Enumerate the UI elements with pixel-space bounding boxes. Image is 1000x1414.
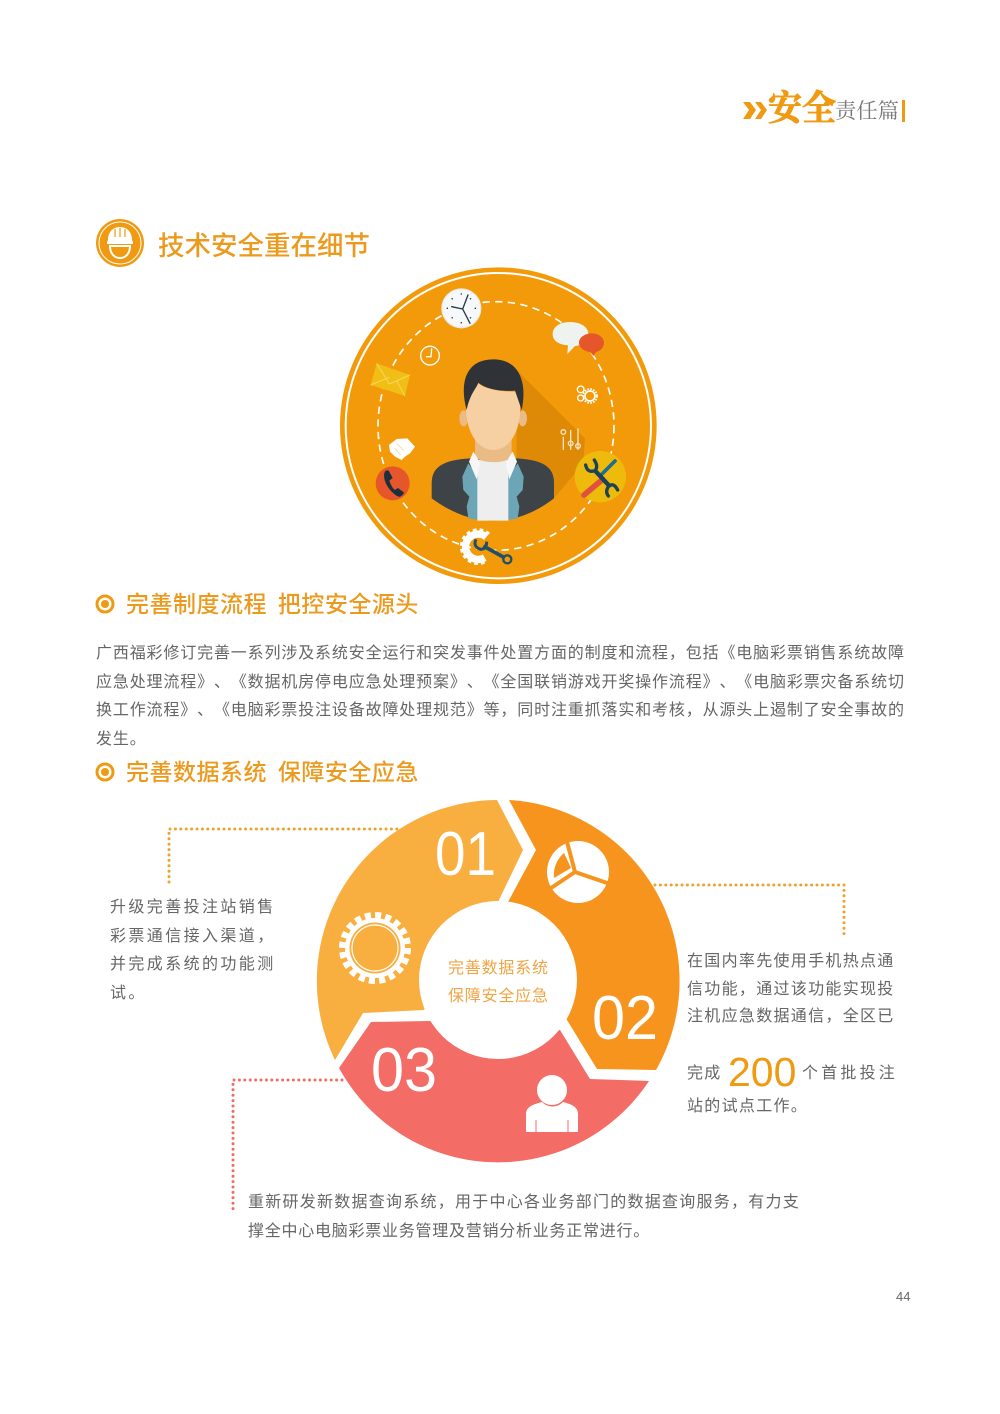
center label: 保障安全应急 [448, 988, 549, 1005]
center label: 完善数据系统 [448, 960, 549, 977]
sliders icon [561, 428, 580, 450]
line 1: 广西福彩修订完善一系列涉及系统安全运行和突发事件处置方面的制度和流程，包括《电脑彩票销售系统故障 [96, 645, 905, 662]
line 3: 换工作流程》、《电脑彩票投注设备故障处理规范》等，同时注重抓落实和考核，从源头上遏制了安全事故的 [96, 702, 905, 719]
item 02 lead in: 完成 [687, 1065, 722, 1082]
text block: item 01: 试。 [110, 985, 147, 1002]
center disc [419, 901, 577, 1059]
item 02 first lines: 注机应急数据通信，全区已 [687, 1008, 895, 1025]
cycle diagram [317, 800, 680, 1162]
number 01: 01 [435, 820, 496, 889]
icon: person [526, 1075, 578, 1132]
body paragraph [96, 644, 905, 748]
handshake icon [389, 438, 415, 460]
item 02 first lines [687, 952, 895, 1025]
timer icon [421, 346, 439, 365]
section heading two: 完善数据系统 保障安全应急 [126, 759, 419, 785]
text block: item 01: 并完成系统的功能测 [110, 956, 276, 973]
icon: safety helmet badge [96, 219, 144, 267]
header bar [902, 100, 905, 122]
gear and wrench icon [461, 530, 511, 563]
chat bubbles icon [553, 322, 604, 356]
connector: item 01 dotted line [169, 829, 397, 882]
item 02 line four: 个首批投注 [802, 1065, 898, 1082]
icon: pie chart [547, 838, 610, 903]
segment 03 [339, 1021, 649, 1162]
item 02 first lines: 信功能，通过该功能实现投 [687, 980, 895, 998]
text block: item 02 [687, 952, 898, 1115]
line 4: 发生。 [96, 731, 147, 748]
main heading: 技术安全重在细节 [158, 231, 370, 261]
item 03 line two: 撑全中心电脑彩票业务管理及营销分析业务正常进行。 [248, 1223, 650, 1240]
key number 200: 200 [728, 1049, 796, 1095]
clock icon [441, 288, 481, 328]
phone icon [376, 466, 410, 500]
number 03: 03 [371, 1036, 437, 1105]
item 02 first lines: 在国内率先使用手机热点通 [687, 953, 895, 970]
text block: item 03 [248, 1193, 800, 1240]
segment 01 [317, 800, 523, 1060]
item 03 line one: 重新研发新数据查询系统，用于中心各业务部门的数据查询服务，有力支 [248, 1194, 800, 1211]
header chapter mark [743, 81, 905, 131]
text block: item 01: 升级完善投注站销售 [110, 899, 276, 916]
person [432, 359, 554, 521]
bullet: section two [97, 764, 113, 780]
illustration: technician in orange circle [340, 267, 657, 584]
center label [448, 959, 549, 1005]
line 2: 应急处理流程》、《数据机房停电应急处理预案》、《全国联销游戏开奖操作流程》、《电脑彩票灾备系统切 [96, 674, 905, 691]
chapter word: responsibility: 责任篇 [835, 95, 899, 125]
connector: item 03 dotted line [233, 1080, 342, 1210]
envelope icon [371, 363, 410, 396]
number 02: 02 [592, 984, 658, 1053]
chapter word: safety: 安全 [768, 81, 836, 131]
text block: item 01: 彩票通信接入渠道， [110, 928, 276, 945]
icon: gear [342, 916, 408, 980]
long shadow [517, 370, 585, 498]
icon: double chevrons [743, 102, 767, 119]
page number: 44 [896, 1289, 910, 1304]
small gears icon [577, 386, 597, 403]
item 02 last line: 站的试点工作。 [687, 1098, 808, 1115]
bullet: section one [97, 596, 113, 612]
section heading one: 完善制度流程 把控安全源头 [126, 591, 419, 617]
text block: item 01 [110, 898, 276, 1002]
tools badge icon [575, 451, 626, 502]
segment 02 [508, 800, 680, 1070]
connector: item 02 dotted line [655, 885, 844, 938]
